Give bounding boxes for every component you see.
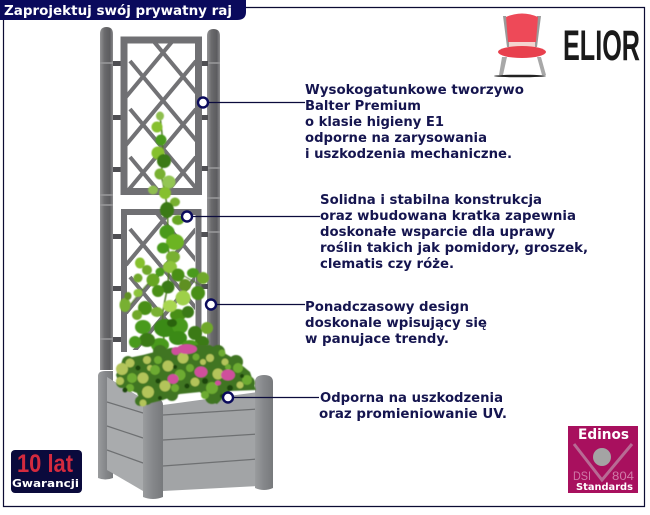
callout 2: oraz wbudowana kratka zapewnia (320, 209, 576, 224)
callout 1 (198, 83, 524, 162)
callout 2: doskonałe wsparcie dla uprawy (320, 225, 556, 240)
illustration: planter with trellis (98, 13, 273, 499)
icon: red chair (494, 14, 546, 77)
lower lattice panel (121, 209, 202, 352)
callout 1: Wysokogatunkowe tworzywo (305, 83, 524, 98)
callout 1: o klasie higieny E1 (305, 115, 444, 130)
callout 4 (223, 391, 507, 422)
callout 2: Solidna i stabilna konstrukcja (320, 193, 542, 208)
climbing plant (120, 112, 213, 352)
callout 1: Balter Premium (305, 99, 421, 114)
logo: Elior (494, 14, 640, 77)
callout 4: oraz promieniowanie UV. (319, 407, 507, 422)
badge: 10 lat gwarancji: Gwarancji (12, 477, 79, 490)
callout 3: Ponadczasowy design (305, 300, 469, 315)
badge: Edinos standards: Edinos (578, 427, 629, 443)
badge: Edinos standards (568, 426, 638, 493)
title banner (0, 0, 246, 20)
badge: 10 lat gwarancji (11, 450, 82, 493)
flower mound (116, 344, 256, 406)
callout 3: doskonale wpisujący się (305, 316, 487, 331)
callout 4: Odporna na uszkodzenia (320, 391, 503, 406)
badge: Edinos standards: 804 (612, 469, 634, 483)
upper lattice panel (120, 36, 202, 195)
trellis posts (100, 27, 220, 370)
badge: Edinos standards: Standards (576, 482, 633, 493)
callout 1: i uszkodzenia mechaniczne. (305, 147, 512, 162)
callout 2: roślin takich jak pomidory, groszek, (320, 241, 588, 256)
title banner: Zaprojektuj swój prywatny raj (4, 4, 232, 19)
callout 2: clematis czy róże. (320, 257, 454, 272)
badge: 10 lat gwarancji: 10 lat (17, 450, 74, 478)
badge: Edinos standards: DSI (573, 469, 591, 483)
callout 1: odporne na zarysowania (305, 131, 487, 146)
callout 3: w panujace trendy. (305, 332, 449, 347)
callout 2 (182, 193, 588, 272)
planter box (98, 371, 273, 499)
callout 3 (206, 300, 487, 347)
